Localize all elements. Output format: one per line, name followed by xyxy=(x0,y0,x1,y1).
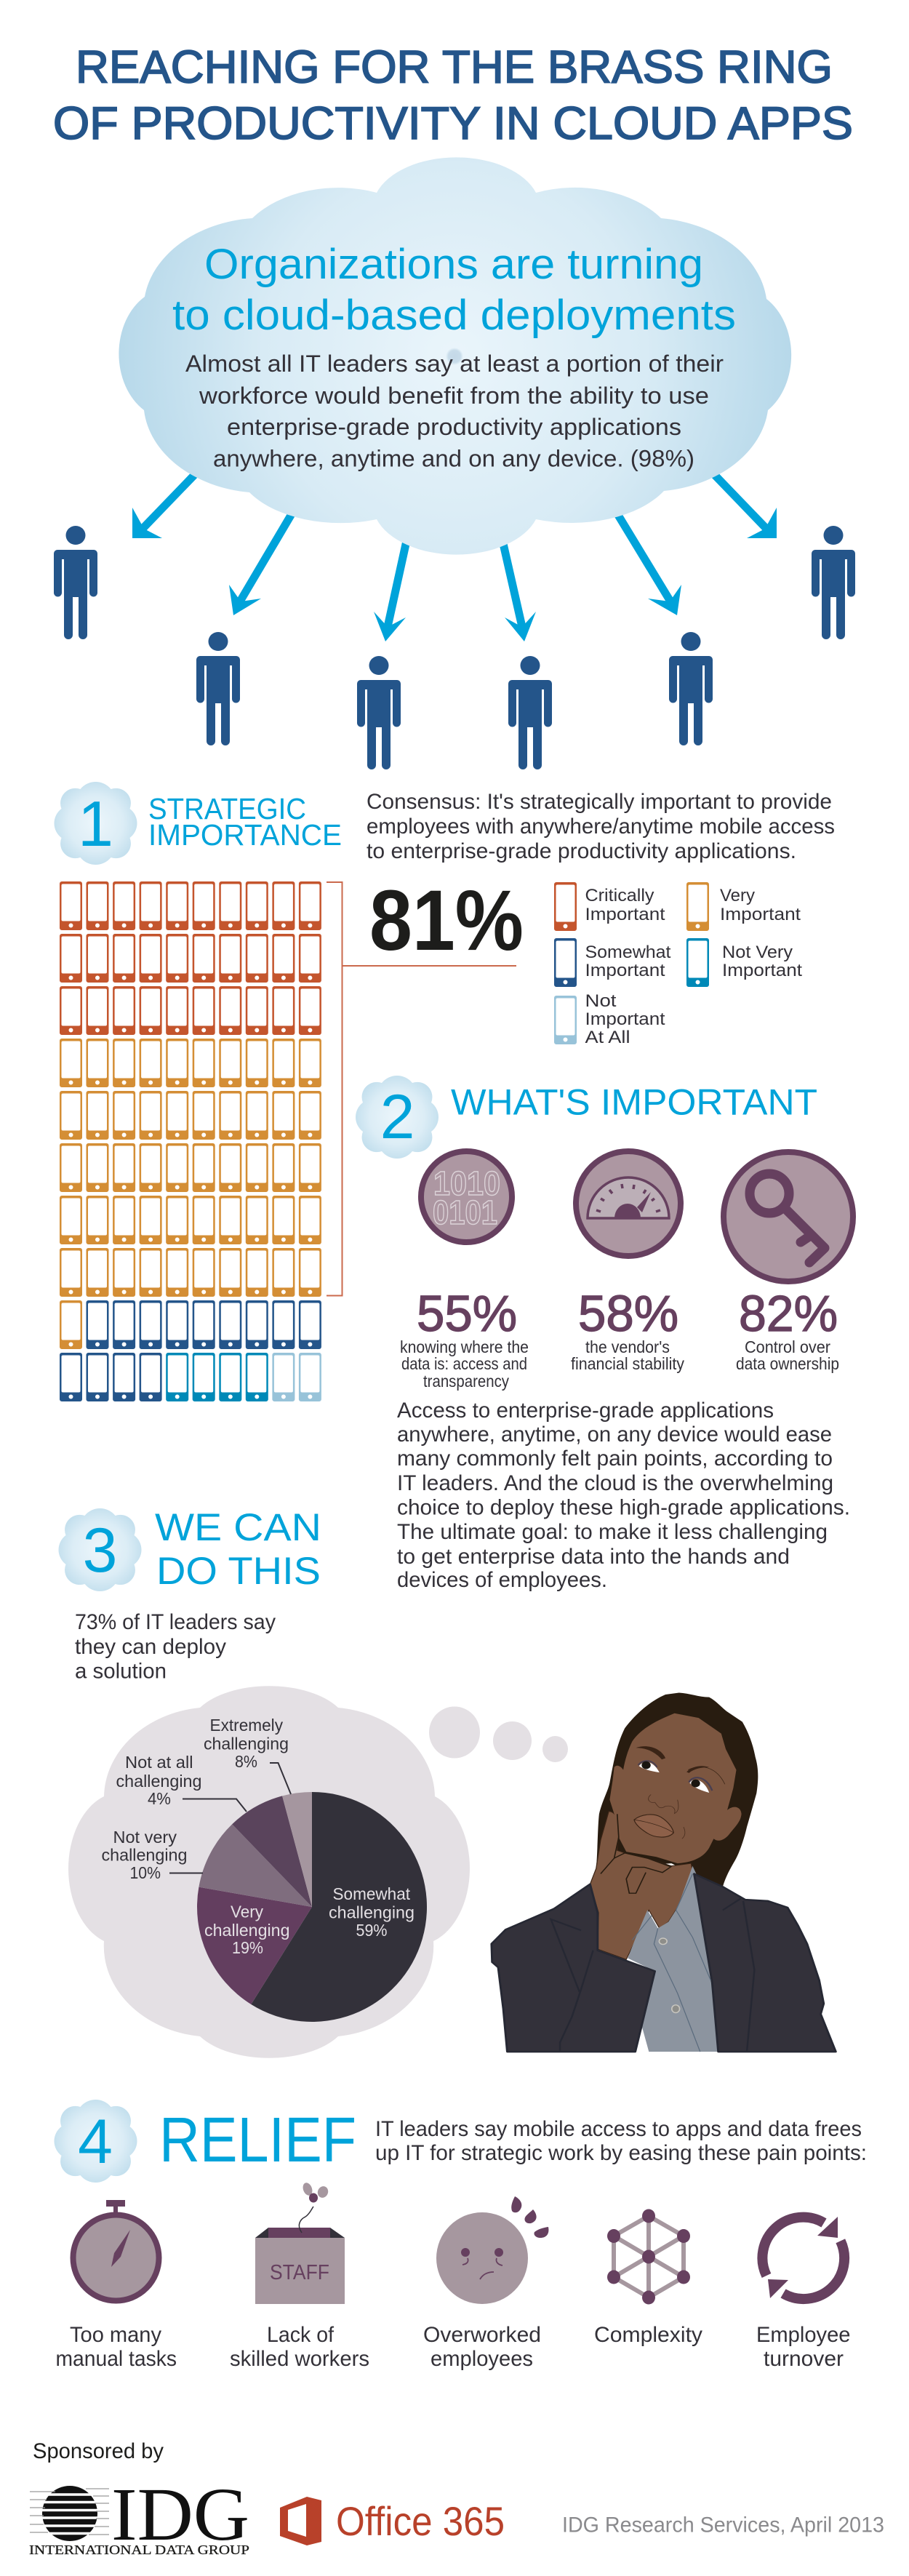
label: somewhat challenging: challenging xyxy=(329,1903,415,1921)
caption: too many manual tasks: manual tasks xyxy=(55,2347,177,2371)
caption: employee turnover: turnover xyxy=(764,2347,844,2371)
cloud body text: enterprise-grade productivity applications xyxy=(227,414,681,440)
caption: overworked employees xyxy=(423,2323,541,2371)
section 1 heading xyxy=(148,792,342,852)
section 3 heading xyxy=(155,1506,321,1593)
label: somewhat challenging xyxy=(329,1884,415,1940)
legend: not important at all: Important xyxy=(585,1009,665,1029)
section 1 text xyxy=(367,790,835,863)
label: extremely challenging: 8% xyxy=(235,1752,257,1771)
cloud body text: anywhere, anytime and on any device. (98%) xyxy=(213,445,694,471)
label: somewhat challenging: Somewhat xyxy=(333,1884,411,1903)
section 3 text: they can deploy xyxy=(75,1635,226,1659)
arrows from cloud to people xyxy=(132,469,777,641)
logo: IDG xyxy=(29,2473,249,2557)
stat: 58%: 58% xyxy=(578,1285,678,1342)
shirt xyxy=(628,1866,720,2052)
caption: overworked employees: Overworked xyxy=(423,2323,541,2347)
slice: not very challenging 10% xyxy=(199,1824,312,1907)
section 1 heading: IMPORTANCE xyxy=(148,818,342,852)
row 4 very important xyxy=(60,1039,321,1087)
panel: cloud xyxy=(119,157,791,555)
icon: staff box with fly xyxy=(255,2181,345,2304)
icon: overworked face xyxy=(436,2196,548,2304)
slice: not at all challenging xyxy=(282,1792,312,1907)
legend: very important xyxy=(686,882,801,931)
row 2 critically important xyxy=(60,934,321,983)
section 1 text: employees with anywhere/anytime mobile access xyxy=(367,815,835,839)
section 3 text: a solution xyxy=(75,1660,167,1683)
icon: binary data: 0101 xyxy=(433,1193,497,1231)
caption: complexity: Complexity xyxy=(594,2323,702,2347)
section 2 paragraph: many commonly felt pain points, according to xyxy=(397,1447,833,1471)
title xyxy=(53,42,853,149)
bracket to 81% xyxy=(327,882,516,1296)
label: very challenging xyxy=(204,1903,289,1957)
icon: staff box with fly: STAFF xyxy=(270,2261,329,2284)
legend: somewhat important: Somewhat xyxy=(585,943,671,962)
logo: IDG: IDG xyxy=(111,2473,249,2556)
row 9 very and somewhat important xyxy=(60,1300,321,1349)
label: not at all challenging: 4% xyxy=(148,1789,171,1808)
section 2 badge: 2 xyxy=(380,1082,415,1152)
caption: overworked employees: employees xyxy=(431,2347,533,2371)
row 5 very important xyxy=(60,1091,321,1140)
caption: lack of skilled workers: skilled workers xyxy=(230,2347,369,2371)
thought cloud xyxy=(68,1686,568,2058)
cloud heading: Organizations are turning xyxy=(204,241,703,288)
label: somewhat challenging: 59% xyxy=(356,1921,387,1940)
label: very challenging: 19% xyxy=(232,1938,263,1957)
section 4 text: up IT for strategic work by easing these pain points: xyxy=(375,2141,867,2165)
row 8 very important xyxy=(60,1248,321,1297)
section 4 badge: 4 xyxy=(78,2107,113,2177)
section 2 paragraph: to get enterprise data into the hands and xyxy=(397,1545,790,1569)
right brow xyxy=(688,1767,725,1784)
legend: not important at all: At All xyxy=(585,1028,630,1047)
label: extremely challenging: Extremely xyxy=(209,1716,283,1735)
phone pictogram grid xyxy=(60,881,321,1401)
people icons xyxy=(54,526,855,769)
section 2 paragraph: anywhere, anytime, on any device would ease xyxy=(397,1423,832,1447)
section 2 paragraph: The ultimate goal: to make it less challenging xyxy=(397,1520,828,1544)
label: not at all challenging: Not at all xyxy=(125,1753,193,1772)
lips xyxy=(634,1815,673,1837)
cloud shape xyxy=(119,157,791,555)
caption: lack of skilled workers xyxy=(230,2323,369,2371)
slice: somewhat challenging 59% xyxy=(251,1792,427,2022)
section 4 text xyxy=(375,2117,867,2165)
section 2 paragraph xyxy=(397,1399,850,1592)
stat: 55% xyxy=(400,1285,529,1391)
cloud heading: to cloud-based deployments xyxy=(172,292,736,339)
section 1 badge: 1 xyxy=(78,788,113,860)
caption: too many manual tasks xyxy=(55,2323,177,2371)
row 3 critically important xyxy=(60,986,321,1035)
section 2 paragraph: Access to enterprise-grade applications xyxy=(397,1399,774,1423)
row 6 very important xyxy=(60,1143,321,1192)
legend: not very important xyxy=(686,938,802,987)
row 7 very important xyxy=(60,1196,321,1244)
legend: critically important: Important xyxy=(585,905,665,924)
section 2 paragraph: IT leaders. And the cloud is the overwhelming xyxy=(397,1471,833,1495)
stat: 55%: data is: access and xyxy=(401,1354,527,1373)
section 3 text xyxy=(75,1610,276,1683)
legend: somewhat important xyxy=(554,938,671,987)
section 1 heading: STRATEGIC xyxy=(148,792,306,825)
legend: not very important: Important xyxy=(722,961,802,980)
slice: very challenging 19% xyxy=(197,1887,312,2004)
label: not at all challenging: challenging xyxy=(116,1772,202,1791)
legend: very important: Important xyxy=(720,905,801,924)
stat: 82%: Control over xyxy=(745,1337,830,1356)
section 3 badge xyxy=(58,1508,141,1591)
icon: turnover cycle xyxy=(762,2217,844,2299)
legend: not important at all: Not xyxy=(585,991,617,1011)
illustration: thinking woman xyxy=(492,1692,836,2052)
jacket details xyxy=(551,1898,754,2052)
stat: 58%: the vendor's xyxy=(585,1337,670,1356)
left eye xyxy=(639,1762,660,1772)
logo: IDG: INTERNATIONAL DATA GROUP xyxy=(29,2543,249,2557)
legend xyxy=(554,882,802,1047)
row 1 critically important xyxy=(60,881,321,930)
label: not very challenging: Not very xyxy=(113,1828,177,1847)
caption: too many manual tasks: Too many xyxy=(70,2323,161,2347)
logo: Office 365: Office 365 xyxy=(336,2498,505,2544)
left brow xyxy=(636,1746,665,1759)
logo: Office 365 xyxy=(280,2497,505,2545)
legend: very important: Very xyxy=(720,886,755,905)
stat: 55%: 55% xyxy=(417,1285,517,1342)
caption: lack of skilled workers: Lack of xyxy=(267,2323,335,2347)
row 10 somewhat, not very and not at all important xyxy=(60,1353,321,1401)
source credit: IDG Research Services, April 2013 xyxy=(562,2513,884,2537)
legend: not very important: Not Very xyxy=(722,943,793,962)
cloud body text xyxy=(185,351,724,471)
icon: binary data xyxy=(421,1151,512,1242)
section 3 heading: WE CAN xyxy=(155,1506,321,1549)
legend: somewhat important: Important xyxy=(585,961,665,980)
shirt details xyxy=(632,1873,710,2052)
stat: 82% xyxy=(736,1285,839,1373)
right eye xyxy=(689,1780,709,1793)
stat: 82%: data ownership xyxy=(736,1354,839,1373)
legend: not important at all xyxy=(554,991,665,1047)
stat: 58% xyxy=(571,1285,684,1373)
title: REACHING FOR THE BRASS RING xyxy=(76,42,833,93)
legend: critically important: Critically xyxy=(585,886,654,905)
caption: employee turnover: Employee xyxy=(756,2323,851,2347)
section 4 text: IT leaders say mobile access to apps and data frees xyxy=(375,2117,862,2141)
cloud body text: workforce would benefit from the ability to use xyxy=(199,383,709,409)
label: extremely challenging xyxy=(204,1716,291,1794)
cloud heading xyxy=(172,241,736,339)
icon: binary data: 1010 xyxy=(433,1164,500,1202)
section 2 paragraph: devices of employees. xyxy=(397,1568,607,1592)
title: OF PRODUCTIVITY IN CLOUD APPS xyxy=(53,98,853,149)
caption: employee turnover xyxy=(756,2323,851,2371)
stat: 58%: financial stability xyxy=(571,1354,684,1373)
stat: 55%: transparency xyxy=(423,1372,509,1391)
section 2 heading: WHAT'S IMPORTANT xyxy=(451,1082,817,1123)
slice: extremely challenging xyxy=(232,1796,312,1907)
section 3 badge: 3 xyxy=(83,1516,117,1585)
hand lines xyxy=(601,1814,671,1893)
nose xyxy=(649,1794,678,1814)
icon: complexity network xyxy=(607,2209,690,2304)
legend: critically important xyxy=(554,882,665,931)
cloud body text: Almost all IT leaders say at least a portion of their xyxy=(185,351,724,377)
sponsored by: Sponsored by xyxy=(33,2439,164,2463)
stat: 55%: knowing where the xyxy=(400,1337,529,1356)
label: very challenging: Very xyxy=(231,1903,263,1921)
label: not very challenging: challenging xyxy=(102,1846,188,1865)
icon: gauge xyxy=(576,1151,681,1256)
neck and hand xyxy=(590,1812,693,1959)
icon: key xyxy=(724,1152,853,1281)
label: not very challenging: 10% xyxy=(129,1863,161,1882)
section 1 text: to enterprise-grade productivity applications. xyxy=(367,839,796,863)
81% stat: 81% xyxy=(369,873,524,969)
section 1 text: Consensus: It's strategically important to provide xyxy=(367,790,832,814)
section 3 text: 73% of IT leaders say xyxy=(75,1610,276,1634)
section 2 badge xyxy=(356,1076,439,1159)
label: not very challenging xyxy=(102,1828,203,1882)
section 4 heading: RELIEF xyxy=(159,2105,356,2175)
stat: 82%: 82% xyxy=(739,1285,838,1342)
section 3 heading: DO THIS xyxy=(156,1550,321,1593)
section 2 paragraph: choice to deploy these high-grade applications. xyxy=(397,1495,850,1520)
hair xyxy=(596,1692,758,1887)
label: extremely challenging: challenging xyxy=(204,1734,289,1753)
icon: stopwatch xyxy=(73,2200,159,2301)
jacket xyxy=(492,1873,836,2052)
face xyxy=(609,1713,742,1863)
section 4 badge xyxy=(54,2100,137,2183)
pie chart xyxy=(102,1716,427,2022)
label: not at all challenging xyxy=(116,1753,247,1812)
section 1 badge xyxy=(54,782,137,865)
label: very challenging: challenging xyxy=(204,1921,289,1940)
